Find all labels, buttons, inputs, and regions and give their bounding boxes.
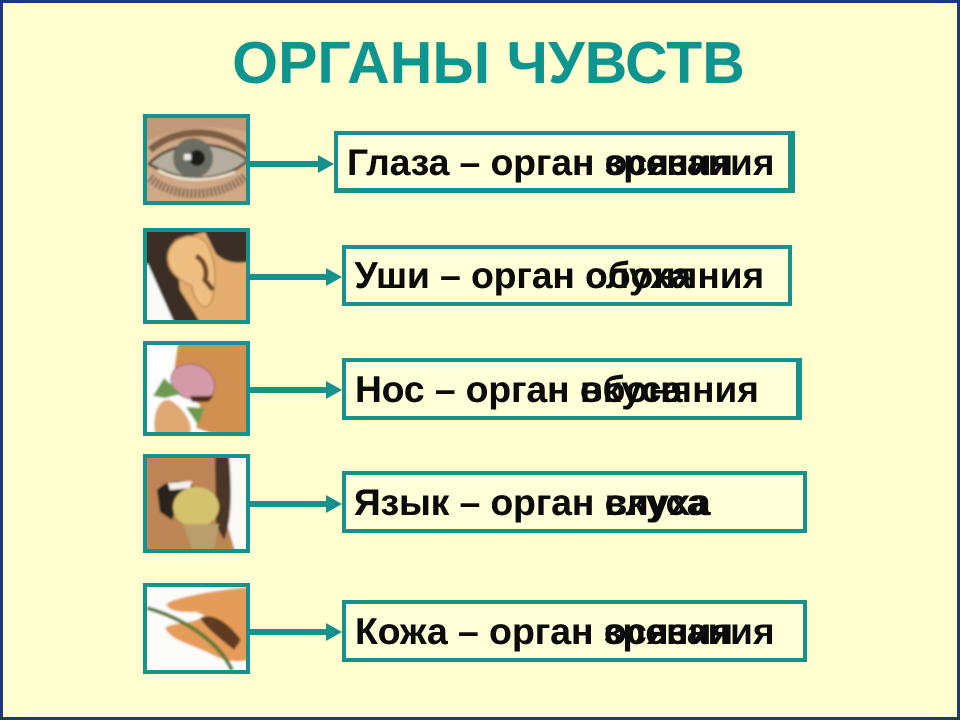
label box: eyes: Глаза – орган зрения — [347, 141, 733, 183]
label box: ears — [344, 247, 790, 304]
arrow: ear to label — [250, 268, 342, 286]
arrow: eye to label — [250, 155, 334, 173]
label box: eyes — [334, 131, 795, 193]
icon: eye — [145, 116, 248, 203]
label box: nose: Нос – орган вкуса — [355, 368, 683, 410]
label box: eyes: Глаза – орган осязания — [347, 141, 774, 183]
arrow: tongue to label — [250, 495, 342, 513]
title: ОРГАНЫ ЧУВСТВ — [232, 30, 745, 96]
label box: tongue: Язык – орган вкуса — [354, 481, 708, 523]
label box: skin: Кожа – орган осязания — [355, 610, 775, 652]
label box: tongue: Язык – орган слуха — [354, 481, 711, 523]
arrow: nose to label — [250, 381, 342, 399]
icon: nose smelling a flower — [145, 343, 248, 434]
label box: ears: Уши – орган обоняния — [354, 254, 764, 296]
label box: skin: Кожа – орган зрения — [355, 610, 733, 652]
icon: hand touching a thorny stem — [145, 585, 248, 672]
arrow: skin to label — [250, 623, 342, 641]
label box: nose: Нос – орган обоняния — [355, 368, 759, 410]
label box: nose — [344, 358, 802, 420]
label box: ears: Уши – орган слуха — [354, 254, 692, 296]
icon: ear — [145, 230, 248, 322]
label box: tongue — [344, 473, 805, 531]
icon: tongue with ice cream — [145, 456, 248, 551]
label box: skin — [344, 602, 805, 660]
